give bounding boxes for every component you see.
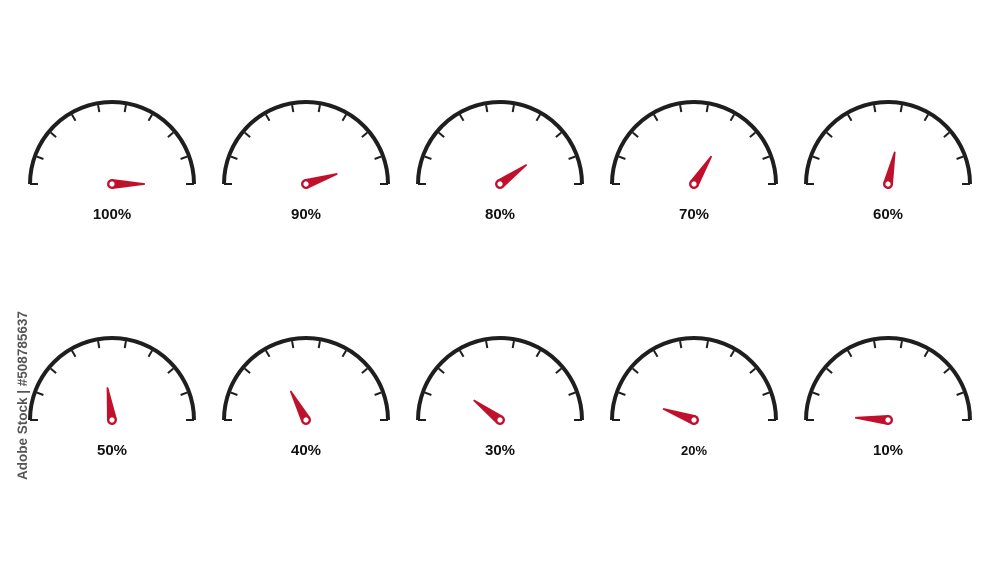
gauge: 30% bbox=[418, 338, 582, 459]
gauge: 10% bbox=[806, 338, 970, 459]
gauge: 10%: 10% bbox=[873, 442, 903, 459]
gauge: 40% bbox=[224, 338, 388, 459]
gauge: 70%: 70% bbox=[679, 206, 709, 223]
gauge: 60% bbox=[806, 102, 970, 223]
gauge: 20%: 20% bbox=[681, 443, 707, 458]
gauge: 30%: 30% bbox=[485, 442, 515, 459]
gauge: 70% bbox=[612, 102, 776, 223]
gauge: 100% bbox=[30, 102, 194, 223]
gauge: 100%: 100% bbox=[93, 206, 131, 223]
gauge: 50% bbox=[30, 338, 194, 459]
gauge: 90% bbox=[224, 102, 388, 223]
gauge: 40%: 40% bbox=[291, 442, 321, 459]
gauge: 20% bbox=[612, 338, 776, 458]
gauge: 50%: 50% bbox=[97, 442, 127, 459]
watermark text: Adobe Stock | #508785637 bbox=[15, 311, 30, 480]
gauge: 60%: 60% bbox=[873, 206, 903, 223]
gauge: 80% bbox=[418, 102, 582, 223]
gauge: 90%: 90% bbox=[291, 206, 321, 223]
gauge: 80%: 80% bbox=[485, 206, 515, 223]
